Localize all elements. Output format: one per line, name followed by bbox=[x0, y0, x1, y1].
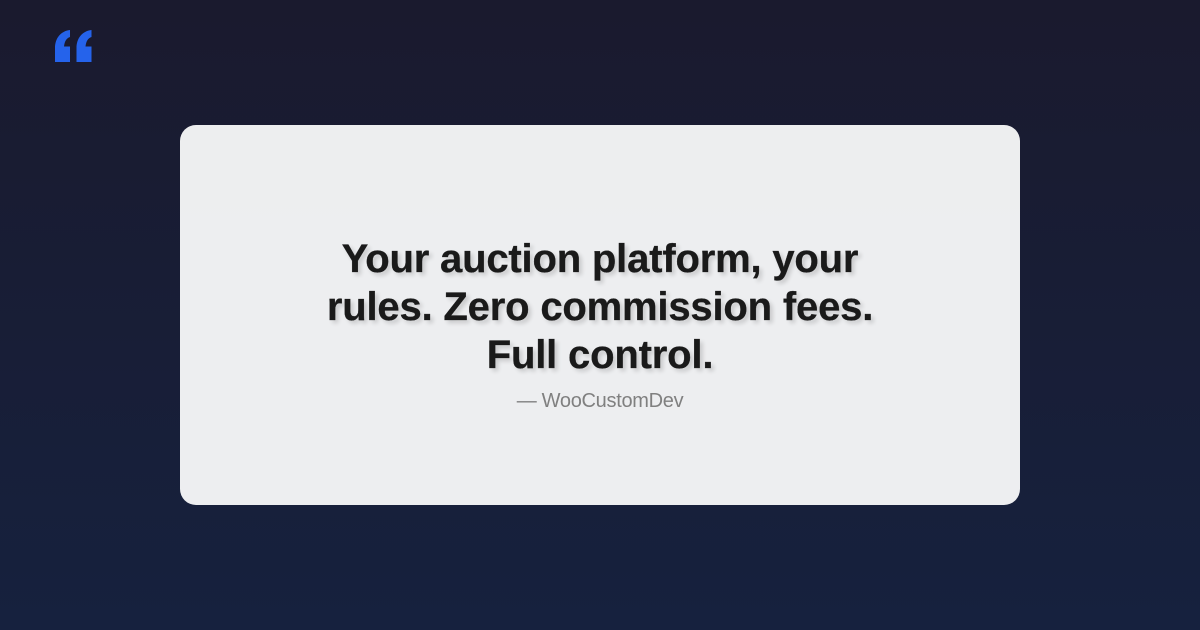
panel: quote card bbox=[180, 125, 1020, 505]
quote text bbox=[327, 237, 875, 377]
quote text: Full control. bbox=[487, 333, 713, 377]
attribution: — WooCustomDev bbox=[517, 390, 683, 412]
quote text: rules. Zero commission fees. bbox=[327, 285, 873, 329]
icon: quotation mark bbox=[55, 30, 92, 62]
quote text: Your auction platform, your bbox=[342, 237, 858, 281]
